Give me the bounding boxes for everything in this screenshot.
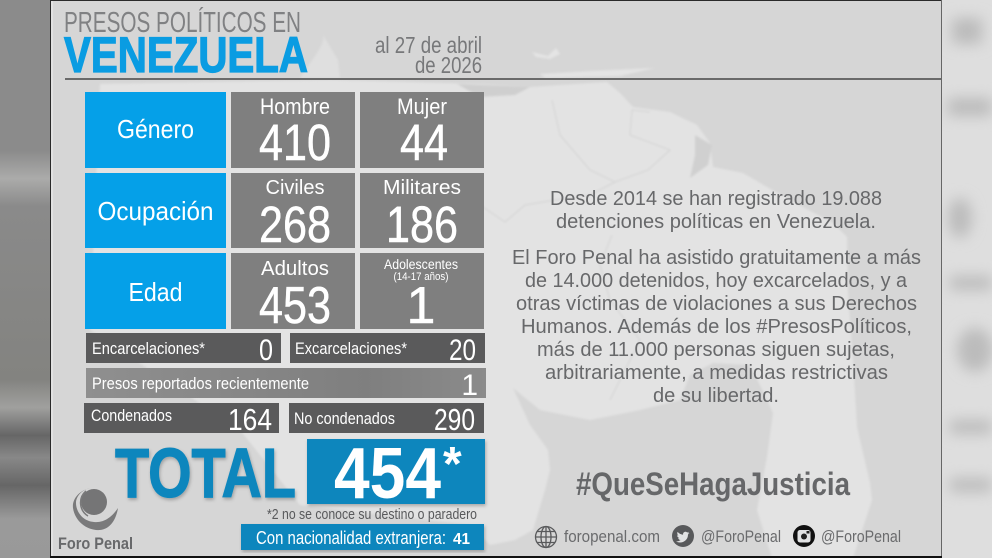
excarcelaciones	[290, 333, 485, 367]
encarcelaciones: 0	[259, 334, 273, 367]
website: foropenal.com	[564, 527, 660, 546]
icon: globe	[536, 526, 556, 548]
label: ocupación	[85, 173, 226, 248]
twitter handle: @ForoPenal	[701, 527, 781, 546]
logo: Foro Penal: Foro Penal	[58, 534, 133, 553]
cell: mujer	[360, 92, 484, 171]
text block: foro penal: más de 11.000 personas siguen sujetas,	[537, 338, 895, 361]
footer links	[536, 525, 901, 548]
cell: adolescentes: Adolescentes	[384, 257, 458, 272]
presos reportados recientemente: 1	[461, 369, 478, 402]
cell: adolescentes: (14-17 años)	[394, 271, 448, 283]
text block: detentions	[550, 187, 882, 233]
cell: adolescentes: 1	[407, 277, 435, 335]
blurred backdrop: right	[941, 0, 992, 558]
no condenados: 290	[434, 402, 475, 437]
cell: adultos: Adultos	[261, 258, 329, 280]
encarcelaciones	[86, 333, 281, 367]
text block: foro penal	[512, 246, 921, 407]
date: al 27 de abril	[375, 32, 482, 58]
row: ocupación	[85, 173, 484, 253]
icon: instagram	[793, 525, 815, 547]
cell: adultos: 453	[259, 277, 331, 335]
cell: militares: Militares	[383, 177, 461, 199]
text block: foro penal: Humanos. Además de los #PresosPolíticos,	[521, 315, 912, 338]
title line 2: VENEZUELA	[64, 27, 308, 83]
text block: foro penal: de 14.000 detenidos, hoy excarcelados, y a	[525, 269, 908, 292]
cell: militares: 186	[386, 196, 458, 253]
text block: detentions: detenciones políticas en Venezuela.	[556, 210, 876, 233]
cell: mujer: Mujer	[397, 94, 447, 119]
presos reportados recientemente: Presos reportados recientemente	[92, 375, 309, 393]
map of Venezuela (background)	[90, 35, 872, 558]
row: edad	[85, 253, 484, 335]
text block: foro penal: El Foro Penal ha asistido gratuitamente a más	[512, 246, 921, 269]
hashtag: #QueSeHagaJusticia	[576, 466, 850, 502]
label: ocupación: Ocupación	[98, 196, 214, 226]
date	[375, 32, 482, 78]
header rule	[65, 78, 941, 80]
condenados: Condenados	[91, 407, 172, 425]
total value	[307, 434, 485, 514]
cell: hombre: 410	[259, 114, 331, 171]
logo: Foro Penal	[58, 488, 133, 553]
label: género	[85, 92, 226, 168]
foreign nationality: 41	[453, 531, 470, 548]
condenados	[84, 402, 279, 437]
presos reportados recientemente	[86, 368, 486, 402]
excarcelaciones: 20	[449, 334, 476, 367]
total value: *	[443, 438, 462, 491]
cell: civiles	[231, 173, 355, 253]
no condenados: No condenados	[294, 410, 395, 428]
cell: mujer: 44	[400, 114, 448, 171]
date: de 2026	[415, 52, 482, 78]
instagram handle: @ForoPenal	[821, 527, 901, 546]
encarcelaciones: Encarcelaciones*	[92, 340, 206, 358]
cell: adultos	[231, 253, 355, 335]
text block: foro penal: de su libertad.	[653, 384, 779, 407]
icon: twitter	[672, 525, 694, 547]
cell: civiles: Civiles	[266, 177, 324, 199]
text block: detentions: Desde 2014 se han registrado 19.088	[550, 187, 882, 210]
text block: foro penal: otras víctimas de violaciones a sus Derechos	[516, 292, 917, 315]
total label: TOTAL	[115, 434, 296, 512]
row: género	[85, 92, 484, 171]
cell: militares	[360, 173, 484, 253]
label: edad	[85, 253, 226, 329]
cell: hombre: Hombre	[260, 94, 330, 119]
cell: adolescentes	[360, 253, 484, 335]
label: edad: Edad	[128, 277, 182, 307]
blurred backdrop: left	[0, 0, 50, 558]
foreign nationality: Con nacionalidad extranjera:	[256, 528, 446, 548]
text block: foro penal: arbitrariamente, a medidas restrictivas	[545, 361, 888, 384]
condenados: 164	[228, 402, 272, 437]
title line 1: PRESOS POLÍTICOS EN	[64, 6, 301, 39]
label: género: Género	[117, 114, 194, 144]
cell: civiles: 268	[259, 196, 331, 253]
total value: 454	[334, 434, 441, 514]
footnote: *2 no se conoce su destino o paradero	[267, 507, 477, 523]
title	[64, 6, 308, 83]
no condenados	[289, 402, 484, 437]
excarcelaciones: Excarcelaciones*	[295, 340, 408, 358]
cell: hombre	[231, 92, 355, 171]
